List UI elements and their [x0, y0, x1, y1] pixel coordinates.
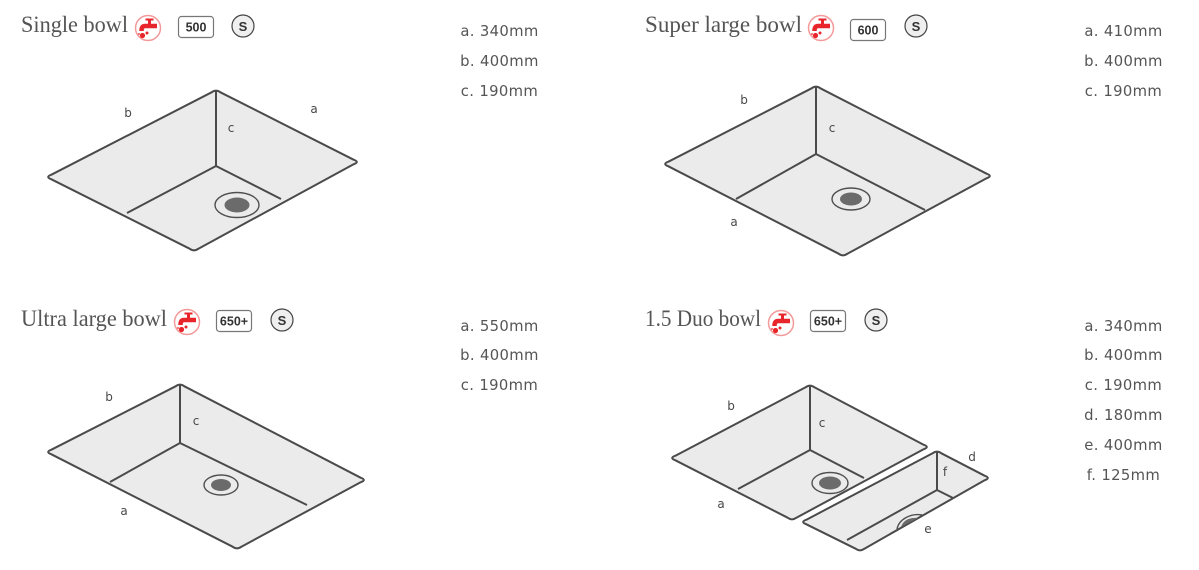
dimensions list: c. 190mm	[461, 377, 538, 394]
badge: S	[271, 309, 293, 331]
dimensions list: f. 125mm	[1087, 467, 1160, 484]
dimensions list: c. 190mm	[1085, 83, 1162, 100]
dimensions list	[460, 318, 539, 394]
badge: 500	[178, 16, 214, 38]
icon: tap	[136, 16, 160, 40]
sink diagram: ultra large bowl: c	[193, 414, 199, 428]
dimensions list: a. 340mm	[1084, 318, 1163, 335]
dimensions list: a. 340mm	[460, 23, 539, 40]
sink diagram: single bowl	[48, 90, 357, 250]
sink diagram: ultra large bowl: b	[105, 390, 113, 404]
sink diagram: ultra large bowl: a	[120, 504, 128, 518]
dimensions list: e. 400mm	[1084, 437, 1163, 454]
sink diagram: super large bowl: c	[829, 121, 835, 135]
dimensions list: d. 180mm	[1084, 407, 1163, 424]
icon: tap	[174, 310, 200, 334]
dimensions list	[1084, 23, 1163, 100]
sink diagram: 1.5 duo bowl: d	[968, 450, 976, 464]
heading: ultra large bowl: Ultra large bowl	[21, 306, 167, 331]
sink diagram: super large bowl: a	[730, 215, 738, 229]
badge: 650+	[810, 310, 846, 332]
heading: 1.5 duo bowl: 1.5 Duo bowl	[645, 306, 761, 331]
dimensions list	[1084, 318, 1163, 484]
dimensions list	[460, 23, 539, 100]
sink diagram: super large bowl	[665, 86, 990, 255]
panel: super large bowl	[645, 12, 1163, 255]
sink diagram: 1.5 duo bowl: b	[727, 399, 735, 413]
dimensions list: c. 190mm	[1085, 377, 1162, 394]
sink diagram: 1.5 duo bowl: a	[717, 497, 725, 511]
badge: 650+: 650+	[814, 314, 842, 328]
heading: single bowl: Single bowl	[21, 12, 128, 37]
panel: ultra large bowl	[21, 306, 539, 548]
sink diagram: 1.5 duo bowl	[672, 385, 988, 550]
dimensions list: c. 190mm	[461, 83, 538, 100]
badge: S: S	[872, 313, 881, 328]
panel: 1.5 duo bowl	[645, 306, 1163, 550]
badge: S: S	[239, 19, 248, 34]
sink diagram: 1.5 duo bowl: f	[943, 465, 948, 479]
sink diagram: super large bowl: b	[740, 93, 748, 107]
badge: S	[905, 15, 927, 37]
sink diagram: single bowl: a	[310, 102, 318, 116]
badge: S	[865, 309, 887, 331]
dimensions list: a. 550mm	[460, 318, 539, 335]
dimensions list: b. 400mm	[460, 347, 539, 364]
badge: 500: 500	[186, 20, 206, 34]
dimensions list: b. 400mm	[1084, 347, 1163, 364]
badge: S: S	[912, 19, 921, 34]
sink diagram: single bowl: b	[124, 106, 132, 120]
heading: super large bowl: Super large bowl	[645, 12, 802, 37]
dimensions list: b. 400mm	[460, 53, 539, 70]
badge: S	[232, 15, 254, 37]
badge: 600	[850, 20, 886, 40]
badge: 650+	[216, 310, 252, 332]
icon: tap	[768, 310, 794, 336]
panel: single bowl	[21, 12, 539, 250]
sink diagram: single bowl: c	[228, 121, 234, 135]
dimensions list: a. 410mm	[1084, 23, 1163, 40]
badge: S: S	[278, 313, 287, 328]
icon: tap	[808, 16, 834, 40]
badge: 650+: 650+	[220, 314, 248, 328]
sink diagram: 1.5 duo bowl: e	[924, 522, 932, 536]
dimensions list: b. 400mm	[1084, 53, 1163, 70]
badge: 600: 600	[858, 24, 878, 38]
sink diagram: ultra large bowl	[48, 384, 364, 548]
sink diagram: 1.5 duo bowl: c	[819, 416, 825, 430]
